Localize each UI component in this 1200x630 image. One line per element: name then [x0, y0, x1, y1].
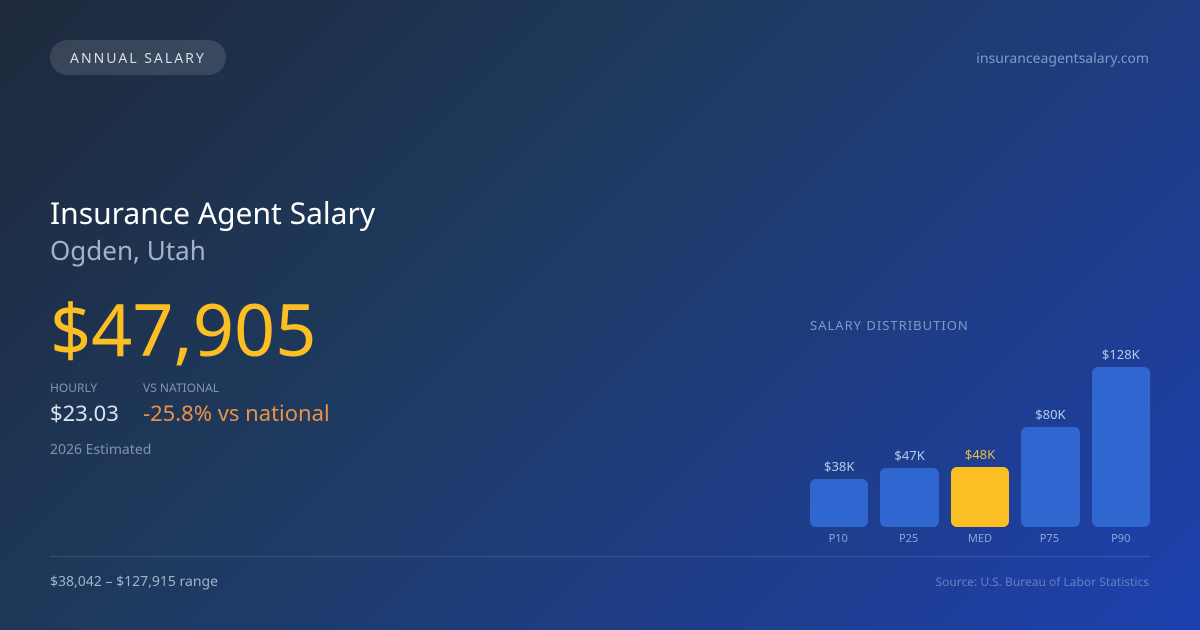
badge: annual salary [50, 40, 226, 75]
estimate note: 2026 Estimated [50, 440, 151, 459]
bar median highlighted: MED [968, 531, 992, 546]
main salary figure: $47,905 [50, 280, 316, 378]
stat: vs national: VS NATIONAL [143, 379, 219, 396]
bar P90: P90 [1111, 531, 1130, 546]
bar P25: P25 [899, 531, 918, 546]
chart heading: SALARY DISTRIBUTION [810, 316, 969, 334]
salary range: $38,042 – $127,915 range [50, 572, 218, 591]
bar P25 [880, 446, 939, 546]
bar P75 [1021, 405, 1080, 546]
bar P90 [1092, 345, 1150, 546]
stat: vs national: -25.8% vs national [143, 398, 330, 428]
bar P10: $38K [824, 457, 854, 475]
bar P75: P75 [1040, 531, 1059, 546]
location subtitle: Ogden, Utah [50, 232, 206, 268]
badge: annual salary: ANNUAL SALARY [70, 49, 206, 68]
bar P90: $128K [1102, 345, 1140, 363]
bar P10: P10 [829, 531, 848, 546]
stat: hourly: HOURLY [50, 379, 97, 396]
stat: hourly [50, 379, 119, 428]
bar median highlighted: $48K [965, 445, 995, 463]
bar P75: $80K [1035, 405, 1066, 423]
stat: vs national [143, 379, 330, 428]
source: Source: U.S. Bureau of Labor Statistics [936, 573, 1149, 590]
title: Insurance Agent Salary [50, 192, 375, 233]
stat: hourly: $23.03 [50, 398, 119, 428]
bar median highlighted [951, 445, 1009, 546]
bar P10 [810, 457, 868, 546]
bar P25: $47K [894, 446, 925, 464]
site url: insuranceagentsalary.com [976, 49, 1149, 68]
